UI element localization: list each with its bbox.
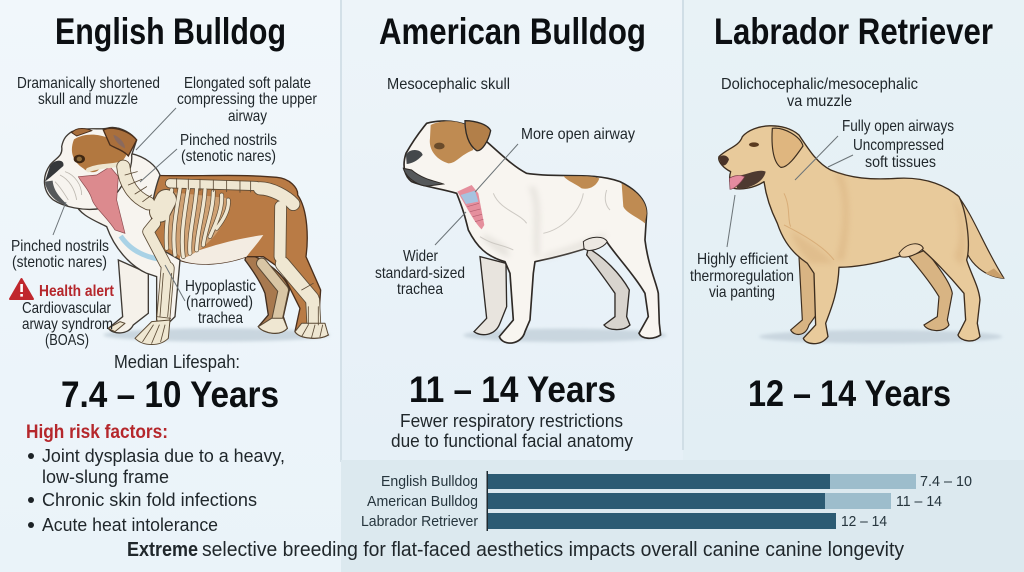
list item: joint dysplasia: low-slung frame bbox=[42, 467, 169, 487]
label: more open airway: More open airway bbox=[521, 126, 635, 143]
label: hypoplastic trachea: Hypoplastic bbox=[185, 278, 256, 295]
illustration: bulldog with exposed skeleton bbox=[44, 127, 330, 345]
stat: Labrador lifespan: 12 – 14 Years bbox=[748, 373, 951, 414]
leader lines bbox=[53, 108, 185, 301]
bar row: Labrador Retriever bbox=[361, 513, 887, 530]
label: wider trachea bbox=[375, 248, 465, 298]
panel: English Bulldog bbox=[0, 0, 341, 572]
label: thermoregulation: thermoregulation bbox=[690, 268, 794, 285]
skeleton bbox=[108, 167, 328, 345]
icon: warning triangle bbox=[10, 279, 33, 299]
label: hypoplastic trachea: trachea bbox=[198, 310, 243, 327]
heading: high risk factors: High risk factors: bbox=[26, 422, 168, 443]
label: pinched nostrils lower bbox=[11, 238, 109, 271]
label: elongated soft palate: airway bbox=[228, 108, 267, 125]
title: English Bulldog: English Bulldog bbox=[55, 11, 286, 52]
illustration: Labrador Retriever bbox=[719, 126, 1004, 344]
label: thermoregulation bbox=[690, 251, 794, 301]
label: pinched nostrils lower: (stenotic nares) bbox=[12, 254, 107, 271]
label: BOAS: (BOAS) bbox=[45, 332, 89, 349]
panel: American Bulldog bbox=[340, 0, 683, 462]
note: fewer respiratory restrictions bbox=[391, 411, 633, 451]
label: BOAS bbox=[22, 300, 113, 349]
label: thermoregulation: Highly efficient bbox=[697, 251, 788, 268]
illustration: American Bulldog bbox=[403, 121, 667, 343]
label: fully open airways: Fully open airways bbox=[842, 118, 954, 135]
label: uncompressed soft tissues: soft tissues bbox=[865, 154, 936, 171]
bar row: English Bulldog: English Bulldog bbox=[381, 473, 478, 490]
panel: Labrador Retriever bbox=[682, 0, 1024, 462]
bar row: American Bulldog: American Bulldog bbox=[367, 493, 478, 510]
label: BOAS: arway syndrom bbox=[22, 316, 113, 333]
bar row: American Bulldog: 11 – 14 bbox=[896, 493, 942, 510]
label: hypoplastic trachea bbox=[185, 278, 256, 327]
label: skull type: Dolichocephalic/mesocephalic bbox=[721, 76, 918, 93]
label: wider trachea: trachea bbox=[397, 281, 443, 298]
panel: lifespan comparison strip bbox=[341, 460, 1024, 572]
label: median lifespan: Median Lifespah: bbox=[114, 352, 240, 372]
footer caption: selective breeding for flat-faced aesthetics impacts overall canine canine longevity bbox=[202, 539, 904, 561]
title: American Bulldog: American Bulldog bbox=[379, 11, 646, 52]
bar row: English Bulldog: 7.4 – 10 bbox=[920, 473, 972, 490]
label: uncompressed soft tissues bbox=[853, 137, 944, 171]
label: shortened skull bbox=[17, 75, 160, 108]
bar row: English Bulldog bbox=[381, 473, 972, 490]
note: fewer respiratory restrictions: Fewer respiratory restrictions bbox=[400, 411, 623, 431]
label: shortened skull: Dramanically shortened bbox=[17, 75, 160, 92]
list item: joint dysplasia: Joint dysplasia due to a heavy, bbox=[42, 446, 285, 466]
stat: English Bulldog lifespan: 7.4 – 10 Years bbox=[61, 374, 279, 415]
label: BOAS: Cardiovascular bbox=[22, 300, 112, 317]
note: fewer respiratory restrictions: due to functional facial anatomy bbox=[391, 431, 633, 451]
label: elongated soft palate: Elongated soft palate bbox=[184, 75, 311, 92]
footer caption: Extreme bbox=[127, 539, 198, 561]
list item: skin fold infections: Chronic skin fold infections bbox=[42, 490, 257, 510]
stat: American Bulldog lifespan: 11 – 14 Years bbox=[409, 369, 616, 410]
label: skull type: va muzzle bbox=[787, 93, 852, 110]
label: pinched nostrils upper bbox=[180, 132, 277, 165]
label: wider trachea: standard-sized bbox=[375, 265, 465, 282]
list: high risk factors bbox=[26, 422, 285, 535]
label: wider trachea: Wider bbox=[403, 248, 439, 265]
label: uncompressed soft tissues: Uncompressed bbox=[853, 137, 944, 154]
label: health alert: Health alert bbox=[39, 283, 115, 300]
bar chart: lifespan comparison bbox=[361, 471, 972, 531]
label: elongated soft palate bbox=[177, 75, 318, 125]
label: pinched nostrils upper: Pinched nostrils bbox=[180, 132, 277, 149]
list item: heat intolerance: Acute heat intolerance bbox=[42, 515, 218, 535]
leader lines bbox=[435, 144, 518, 245]
label: elongated soft palate: compressing the upper bbox=[177, 91, 318, 108]
label: hypoplastic trachea: (narrowed) bbox=[186, 294, 253, 311]
label: shortened skull: skull and muzzle bbox=[38, 91, 138, 108]
label: thermoregulation: via panting bbox=[709, 284, 775, 301]
bar row: Labrador Retriever: 12 – 14 bbox=[841, 513, 887, 530]
leader lines bbox=[727, 136, 853, 247]
label: pinched nostrils upper: (stenotic nares) bbox=[181, 148, 276, 165]
label: mesocephalic skull: Mesocephalic skull bbox=[387, 76, 510, 93]
label: pinched nostrils lower: Pinched nostrils bbox=[11, 238, 109, 255]
bar row: American Bulldog bbox=[367, 493, 942, 510]
bar row: Labrador Retriever: Labrador Retriever bbox=[361, 513, 478, 530]
list item: joint dysplasia bbox=[28, 446, 285, 487]
label: skull type bbox=[721, 76, 918, 110]
